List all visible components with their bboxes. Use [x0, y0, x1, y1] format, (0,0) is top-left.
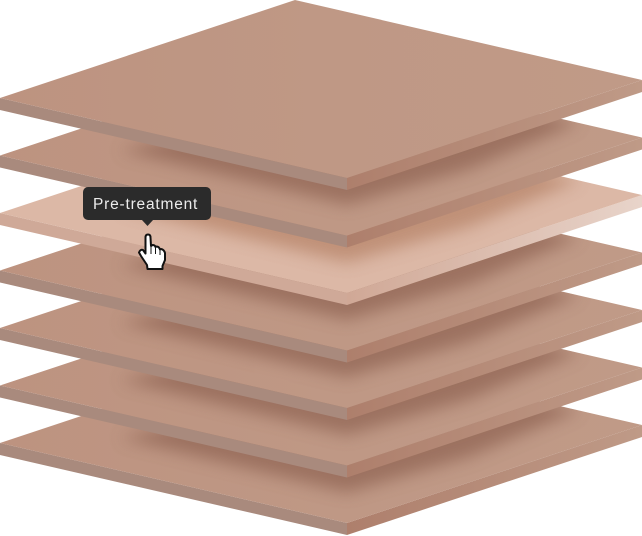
layer 6: [0, 344, 642, 478]
layer 2: [0, 114, 642, 248]
layer 1 (top): [0, 0, 642, 190]
layer 7 (bottom): [0, 402, 642, 535]
tooltip: Pre-treatment: [83, 187, 211, 226]
layer 4: [0, 229, 642, 362]
layer 5: [0, 286, 642, 420]
layer 3: highlighted pre-treatment layer: [0, 172, 642, 305]
tooltip: Pre-treatment: Pre-treatment: [93, 196, 198, 213]
icon: hand cursor: [139, 234, 165, 269]
